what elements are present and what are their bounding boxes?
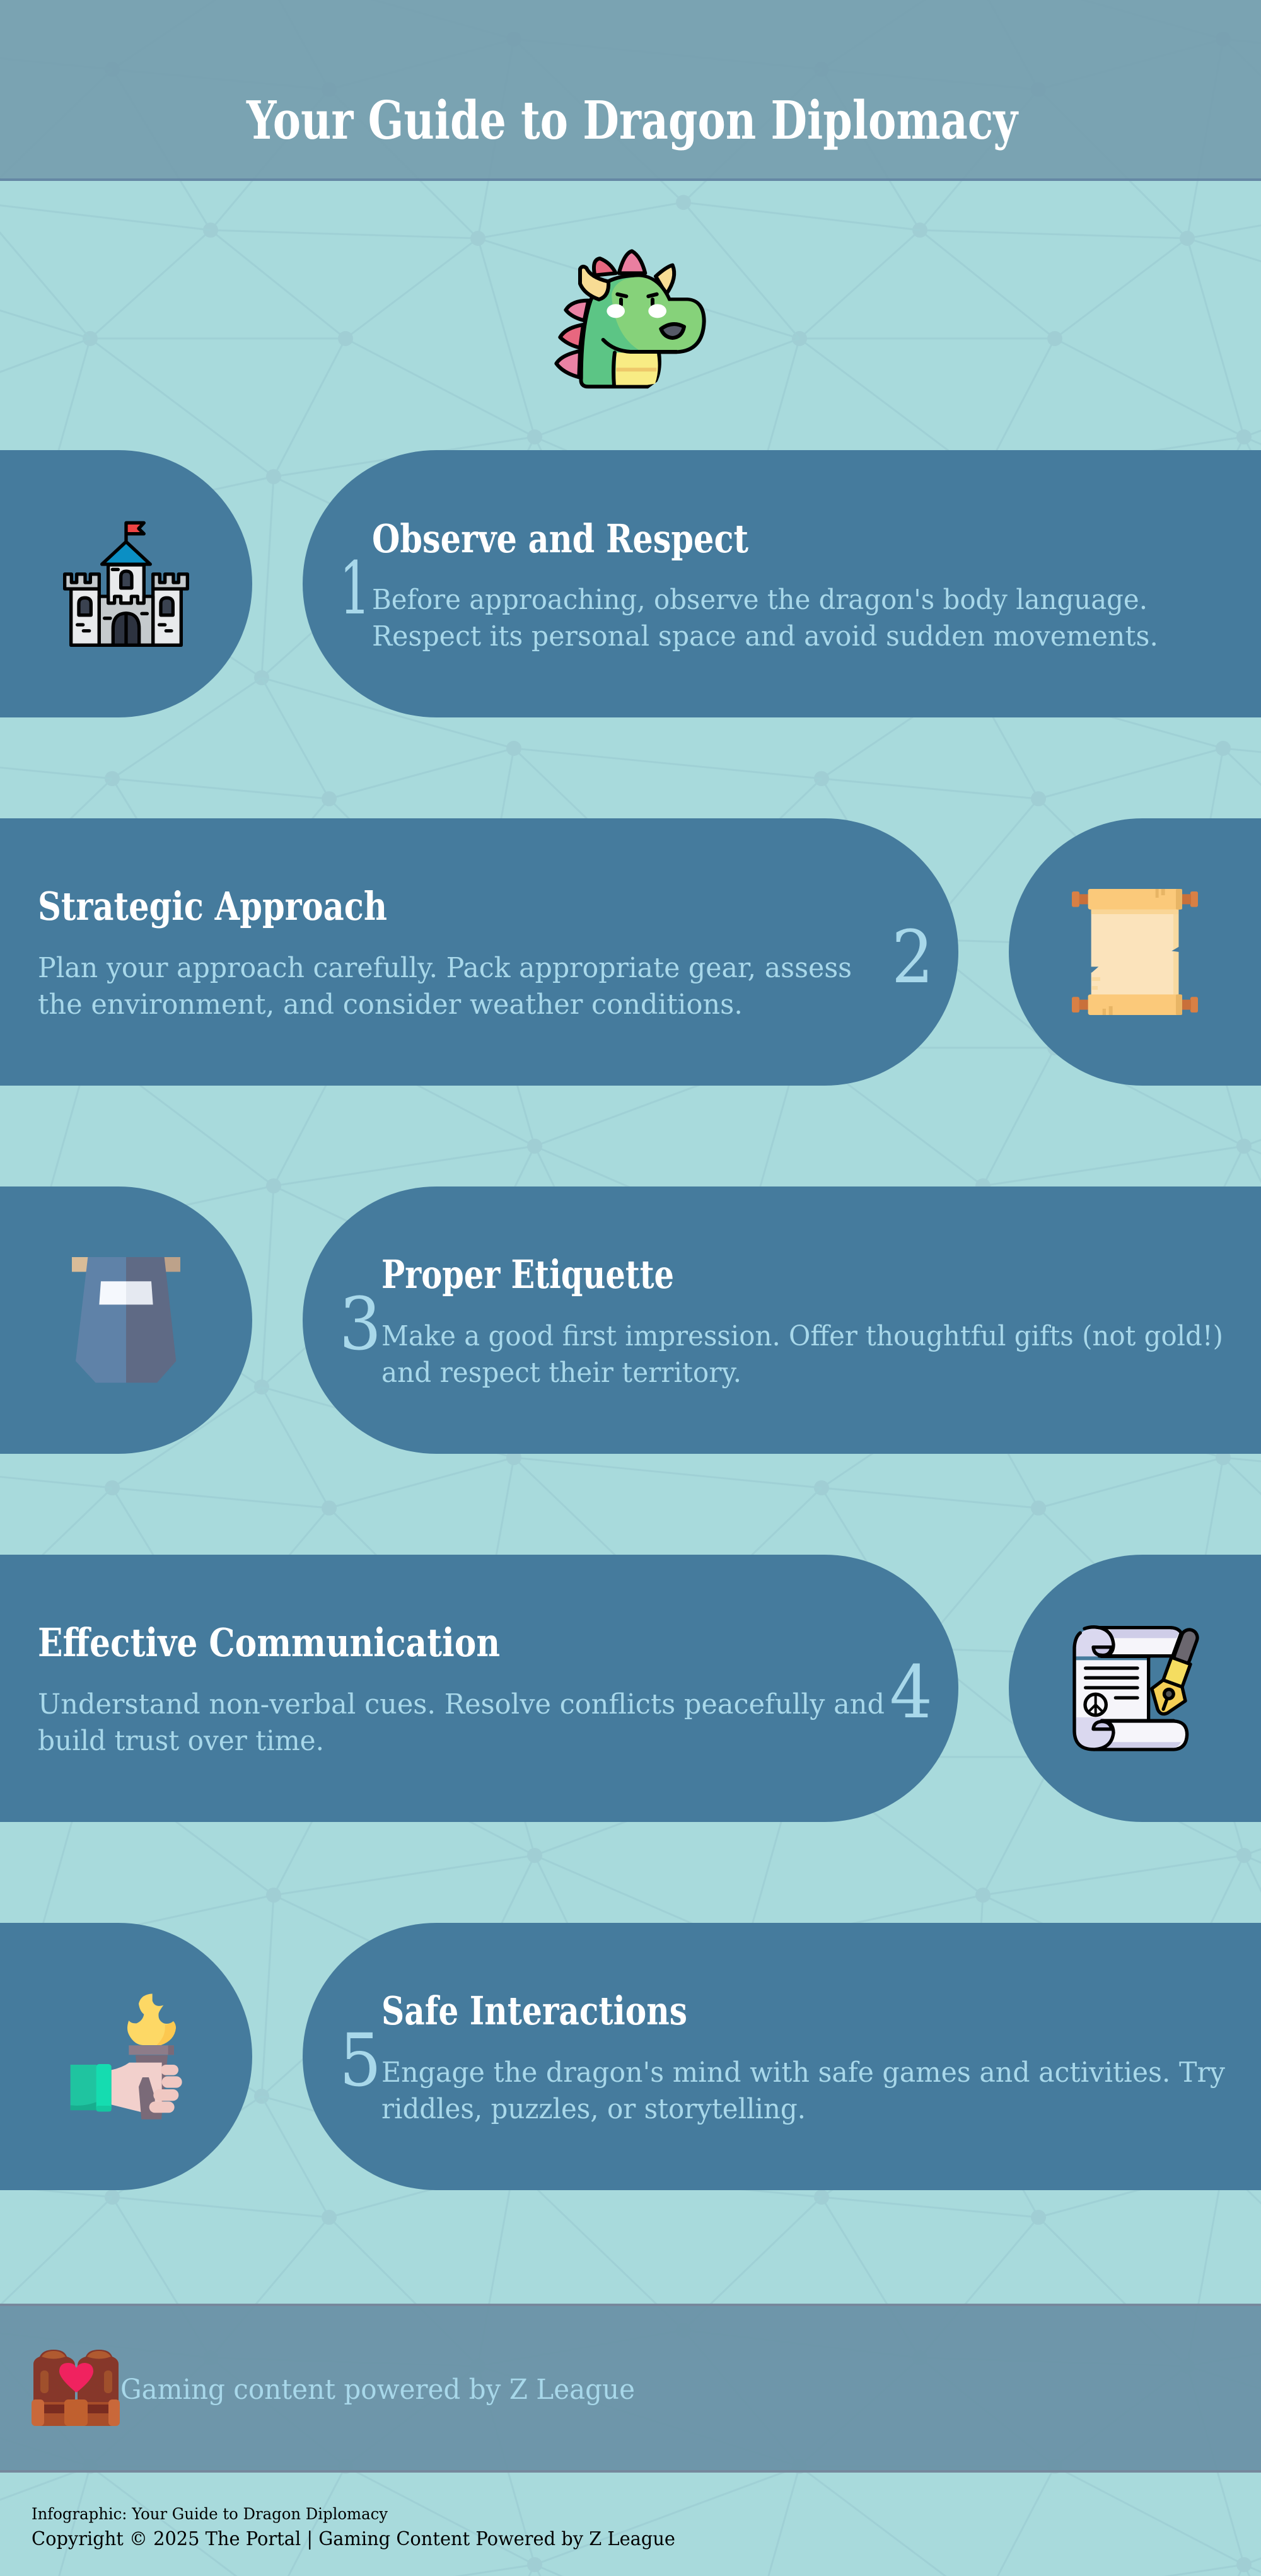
body 4: build trust over time. [38, 1725, 324, 1757]
footer text [32, 2505, 675, 2550]
body 3 [381, 1320, 1223, 1389]
icon: scroll [1072, 889, 1198, 1015]
heading 5: Safe Interactions [381, 1988, 687, 2034]
icon panel 4 [1009, 1555, 1261, 1822]
body 1: Before approaching, observe the dragon's body language. [372, 584, 1148, 616]
panel: step 3 [0, 1186, 1261, 1454]
icon panel 2 [1009, 818, 1261, 1086]
icon panel 3 [0, 1186, 252, 1454]
body 5 [381, 2057, 1225, 2125]
body 2: the environment, and consider weather conditions. [38, 989, 743, 1021]
heading 3: Proper Etiquette [381, 1251, 674, 1297]
sponsor text: Gaming content powered by Z League [120, 2374, 635, 2406]
content panel 2 [0, 818, 958, 1086]
icon: castle [65, 523, 187, 645]
body 1: Respect its personal space and avoid sudden movements. [372, 620, 1158, 653]
content panel 1 [303, 450, 1261, 717]
body 2: Plan your approach carefully. Pack appropriate gear, assess [38, 952, 852, 984]
icon: hand holding torch [71, 1993, 182, 2120]
title: Your Guide to Dragon Diplomacy [246, 90, 1019, 151]
icon: dragon head [556, 251, 704, 386]
heading 4: Effective Communication [38, 1620, 500, 1666]
number 5: 5 [339, 2019, 381, 2103]
body 4: Understand non-verbal cues. Resolve conflicts peacefully and [38, 1688, 885, 1720]
body 4 [38, 1688, 885, 1757]
panel: step 4 [0, 1555, 1261, 1822]
number 4: 4 [890, 1651, 933, 1735]
body 1 [372, 584, 1158, 653]
icon: banner [72, 1257, 180, 1383]
body 3: and respect their territory. [381, 1357, 741, 1389]
footer text: Copyright © 2025 The Portal | Gaming Content Powered by Z League [32, 2528, 675, 2550]
content panel 3 [303, 1186, 1261, 1454]
icon panel 5 [0, 1923, 252, 2190]
panel: step 1 [0, 450, 1261, 717]
icon panel 1 [0, 450, 252, 717]
heading 2: Strategic Approach [38, 883, 387, 929]
body 5: riddles, puzzles, or storytelling. [381, 2093, 806, 2125]
panel: step 2 [0, 818, 1261, 1086]
number 3: 3 [339, 1282, 381, 1367]
icon: peace treaty and pen [1074, 1624, 1209, 1749]
footer text: Infographic: Your Guide to Dragon Diplomacy [32, 2505, 388, 2523]
panel: step 5 [0, 1923, 1261, 2190]
content panel 4 [0, 1555, 958, 1822]
header band [0, 0, 1261, 181]
heading 1: Observe and Respect [372, 516, 748, 562]
number 1: 1 [339, 547, 371, 631]
number 2: 2 [892, 915, 934, 1000]
content panel 5 [303, 1923, 1261, 2190]
icon: heart [59, 2363, 93, 2393]
sponsor band [0, 2304, 1261, 2473]
body 3: Make a good first impression. Offer thoughtful gifts (not gold!) [381, 1320, 1223, 1352]
icon: chairs and heart [32, 2350, 120, 2426]
body 5: Engage the dragon's mind with safe games and activities. Try [381, 2057, 1225, 2089]
body 2 [38, 952, 852, 1021]
